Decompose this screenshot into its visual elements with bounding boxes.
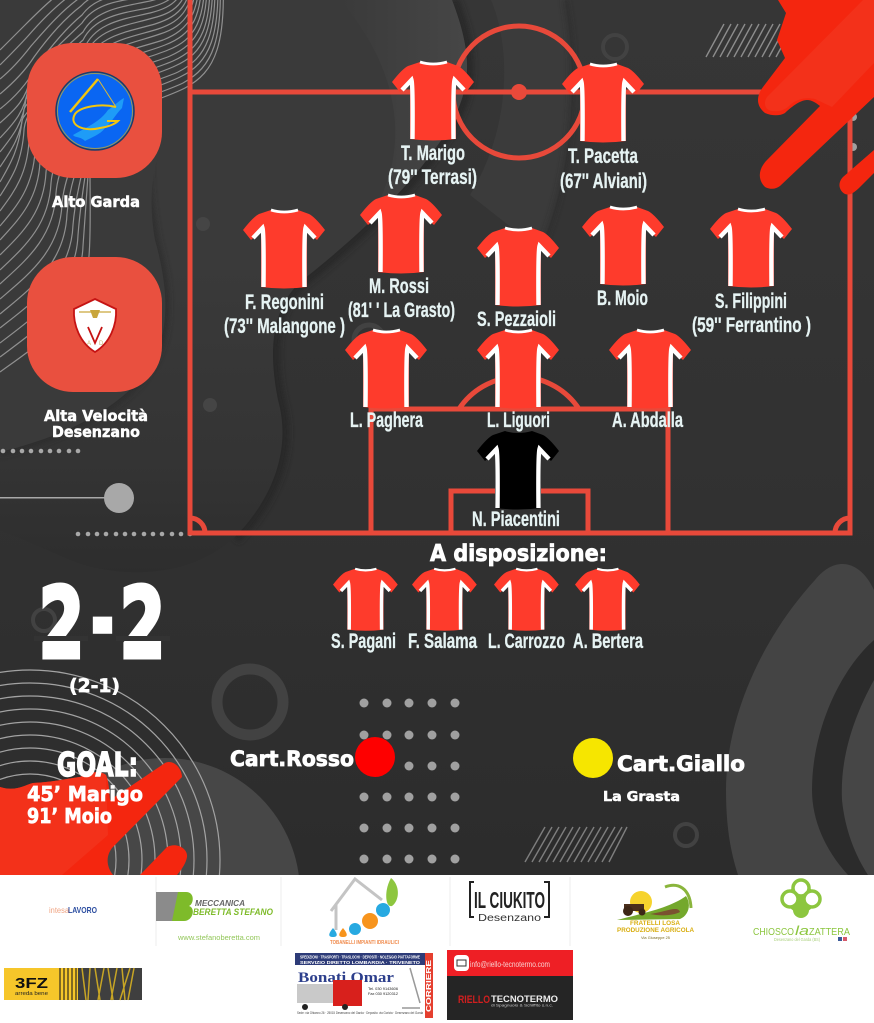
yellow card: La Grasta [603, 790, 680, 805]
substitute: S. Pagani: S. Pagani [331, 630, 396, 653]
player: B. Moio [582, 207, 664, 310]
dots grid [360, 113, 857, 864]
goalkeeper: N. Piacentini [472, 431, 560, 531]
sponsor: Tobanelli Impianti Idraulici [329, 878, 399, 946]
sponsor: Riello Tecnotermo: TECNOTERMO [491, 994, 558, 1004]
final score: 2 [39, 567, 84, 680]
player: F. Regonini [224, 210, 345, 338]
hatch top right [706, 24, 788, 57]
sponsor: Intesa Lavoro: intesa [49, 905, 69, 915]
sponsor: Fratelli Losa: Via Giuseppe 25 [641, 936, 670, 940]
hatch bottom [525, 827, 627, 862]
player: S. Filippini: S. Filippini [715, 290, 787, 313]
goalkeeper: N. Piacentini: N. Piacentini [472, 508, 560, 531]
sponsor: Riello Tecnotermo [447, 950, 573, 1020]
yellow card: Cart.Giallo [617, 752, 745, 776]
sponsor: Tobanelli Impianti Idraulici: TOBANELLI IMPIANTI IDRAULICI [330, 940, 399, 946]
sponsor: 3FZ arreda bene [4, 968, 142, 1000]
sponsor: Il Ciukito: Desenzano [478, 913, 542, 924]
player: T. Marigo [388, 62, 477, 189]
background: bottom left disc and concentric circles [0, 670, 300, 1023]
football pitch [190, 0, 850, 533]
team badge: Alto Garda [27, 43, 162, 178]
sponsor: 3FZ arreda bene: arreda bene [15, 991, 48, 997]
sponsor: Meccanica Beretta Stefano [156, 877, 281, 946]
sponsor: Bonati Omar: Bonati Omar [298, 970, 394, 986]
final score: - [90, 555, 115, 683]
player: F. Regonini: (73'' Malangone ) [224, 315, 345, 338]
sponsor: 3FZ arreda bene: 3FZ [15, 975, 48, 992]
substitute: F. Salama: F. Salama [408, 630, 477, 653]
goals [27, 745, 143, 828]
sponsor: Bonati Omar: Fax 030 9120312 [368, 992, 398, 996]
player: L. Paghera: L. Paghera [350, 409, 423, 432]
player: T. Pacetta: T. Pacetta [568, 145, 638, 168]
substitute: L. Carrozzo [488, 569, 565, 653]
goals: 45’ Marigo [27, 782, 143, 806]
player: S. Filippini [692, 209, 811, 337]
sponsor: Riello Tecnotermo: RIELLO [458, 994, 490, 1006]
background: rings and dots [33, 35, 697, 846]
final score [34, 555, 170, 683]
player: S. Pezzaioli [477, 228, 559, 331]
player: M. Rossi: M. Rossi [369, 275, 429, 298]
player: F. Regonini: F. Regonini [245, 291, 324, 314]
sponsor: Bonati Omar: Sede: via Ghianno 26 · 25015 Desenzano del Garda · Deposito: via Gorizia · Desenzano del Garda [297, 1011, 423, 1015]
player: A. Abdalla [609, 330, 691, 432]
sponsor: Intesa Lavoro: LAVORO [68, 905, 97, 915]
goals: GOAL: [57, 745, 138, 784]
sponsor: Chiosco la Zattera: la [795, 923, 809, 938]
half-time score: (2-1) [69, 675, 120, 697]
player: T. Pacetta [560, 64, 647, 193]
sponsor: Bonati Omar: Tel. 030 9143606 [368, 987, 398, 991]
sponsor: Meccanica Beretta Stefano: www.stefanoberetta.com [177, 933, 260, 942]
heading: A disposizione: A disposizione: [430, 541, 607, 567]
logo: Alta Velocità shield: A [87, 341, 91, 347]
substitute: A. Bertera [573, 569, 643, 653]
sponsor: Chiosco la Zattera: Desenzano del Garda (BS) [774, 937, 820, 942]
player: T. Pacetta: (67'' Alviani) [560, 170, 647, 193]
red card: Cart.Rosso [230, 747, 354, 771]
team badge: Alta Velocità [27, 257, 162, 392]
substitute: S. Pagani [331, 569, 398, 653]
sponsor: Bonati Omar: SPEDIZIONI · TRASPORTI · TRASLOCHI · DEPOSITI · NOLEGGIO PIATTAFORME [300, 954, 421, 960]
player: T. Marigo: T. Marigo [401, 142, 465, 165]
goals: 91’ Moio [27, 804, 112, 828]
player: B. Moio: B. Moio [597, 287, 648, 310]
logo: Alto Garda [56, 72, 134, 150]
sponsor: Meccanica Beretta Stefano: MECCANICA [195, 898, 245, 908]
sponsor: Chiosco la Zattera [753, 880, 850, 942]
sponsor: Fratelli Losa: PRODUZIONE AGRICOLA [617, 927, 694, 934]
player: L. Liguori: L. Liguori [487, 409, 550, 432]
sponsor: Riello Tecnotermo: info@riello-tecnotermo.com [470, 960, 550, 969]
splash top right [758, 0, 874, 195]
player: M. Rossi [348, 195, 455, 322]
substitute: A. Bertera: A. Bertera [573, 630, 643, 653]
sponsor: Il Ciukito [450, 877, 570, 946]
sponsor: Fratelli Losa [617, 885, 694, 940]
sponsor: Bonati Omar [295, 953, 433, 1018]
player: S. Pezzaioli: S. Pezzaioli [477, 308, 556, 331]
background: contour lines [0, 0, 223, 372]
sponsor: Bonati Omar: SERVIZIO DIRETTO LOMBARDIA · TRIVENETO [300, 960, 420, 966]
team name: Alto Garda: Alto Garda [52, 193, 140, 211]
splash bottom left [0, 762, 187, 875]
sponsor: Bonati Omar: CORRIERE [426, 960, 433, 1012]
yellow card [573, 738, 745, 805]
substitute: F. Salama [408, 569, 477, 653]
team name: Alta Velocità Desenzano [44, 407, 148, 441]
player: M. Rossi: (81' ' La Grasto) [348, 299, 455, 322]
player: A. Abdalla: A. Abdalla [612, 409, 683, 432]
logo: Alta Velocità shield [74, 299, 116, 352]
sponsor: Meccanica Beretta Stefano: BERETTA STEFANO [193, 907, 273, 917]
sponsor band [0, 875, 874, 1023]
player: S. Filippini: (59'' Ferrantino ) [692, 314, 811, 337]
logo: Alta Velocità shield: D [99, 341, 104, 347]
sponsor: Chiosco la Zattera: CHIOSCO [753, 926, 794, 938]
substitute: L. Carrozzo: L. Carrozzo [488, 630, 565, 653]
dotted rows and slider [0, 449, 192, 536]
team name: Alta Velocità Desenzano: Alta Velocità [44, 407, 148, 425]
final score: 2 [120, 567, 165, 680]
sponsor: Il Ciukito: IL CIUKITO [474, 887, 545, 913]
sponsor: Chiosco la Zattera: ZATTERA [809, 926, 850, 938]
sponsor: Riello Tecnotermo: di Spagnuolo & Schiffito s.n.c. [491, 1004, 553, 1008]
red card [230, 737, 395, 777]
player: L. Liguori [477, 330, 559, 432]
sponsor: Intesa Lavoro [49, 905, 97, 915]
player: T. Marigo: (79'' Terrasi) [388, 166, 477, 189]
team name: Alta Velocità Desenzano: Desenzano [52, 423, 140, 441]
sponsor: Fratelli Losa: FRATELLI LOSA [630, 920, 680, 927]
background: bottom right blobs [726, 564, 874, 875]
player: L. Paghera [345, 330, 427, 432]
